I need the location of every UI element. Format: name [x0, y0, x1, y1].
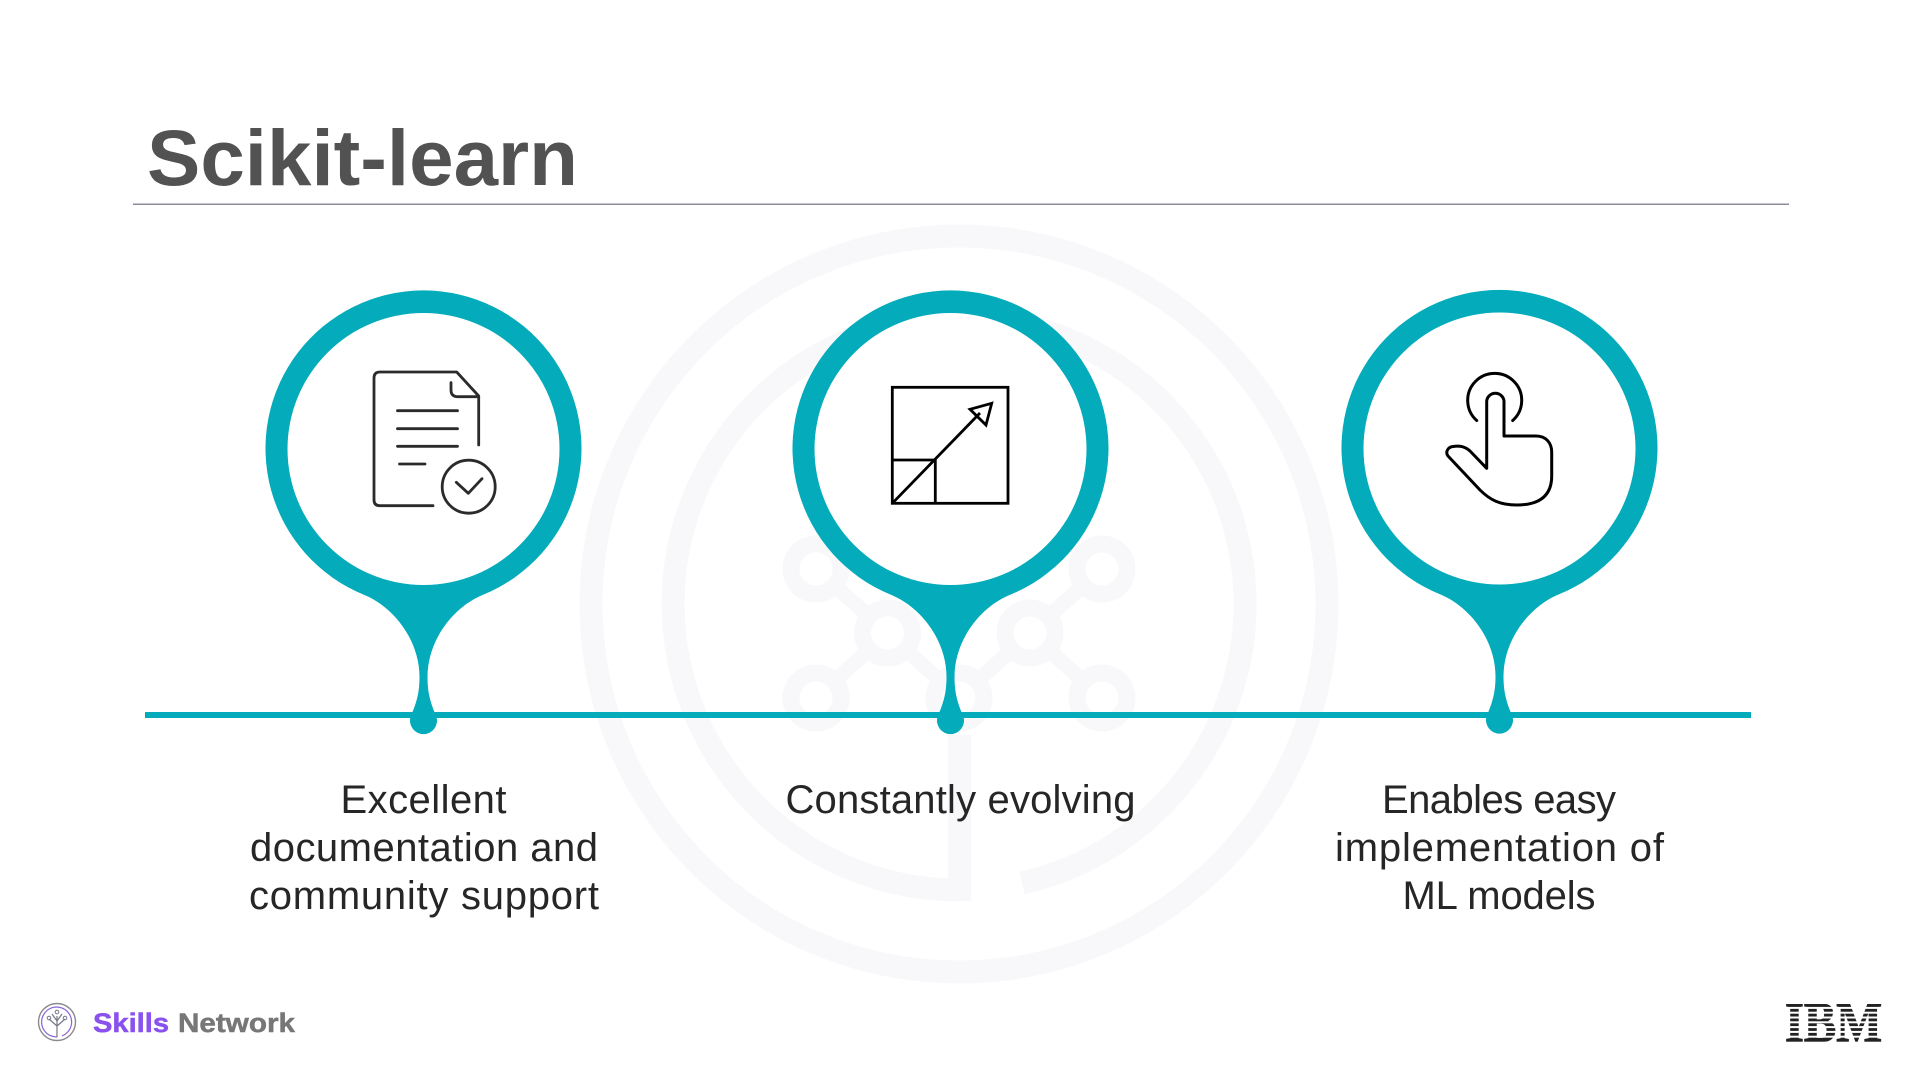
title: Scikit-learn [147, 113, 578, 202]
timeline [145, 712, 1751, 718]
label: easy implementation: Enables easy [1382, 778, 1616, 822]
label: documentation and community [249, 778, 599, 918]
logo: Skills Network wordmark: Network [178, 1008, 296, 1038]
label: easy implementation [1335, 778, 1665, 918]
icon: document with check mark [374, 372, 495, 513]
icon: tapping hand [1447, 373, 1552, 505]
pin 2: evolving [792, 290, 1108, 734]
pin 3: easy implementation [1342, 290, 1658, 734]
logo: Skills Network wordmark [93, 1008, 296, 1038]
logo: Skills Network mark [38, 1004, 76, 1040]
logo: Skills Network wordmark: Skills [93, 1008, 169, 1038]
pin 1: documentation [266, 290, 582, 734]
label: documentation and community: Excellent [340, 778, 506, 822]
label: constantly evolving: Constantly evolving [786, 778, 1136, 822]
label: easy implementation: ML models [1402, 874, 1596, 918]
label: documentation and community: community support [249, 874, 599, 918]
logo: IBM: IBM [1785, 992, 1882, 1055]
label: easy implementation: implementation of [1335, 826, 1665, 870]
icon: scaling square with arrow [892, 387, 1008, 503]
label: documentation and community: documentation and [250, 826, 598, 870]
title divider [133, 204, 1789, 205]
watermark: background tree logo [591, 236, 1327, 972]
